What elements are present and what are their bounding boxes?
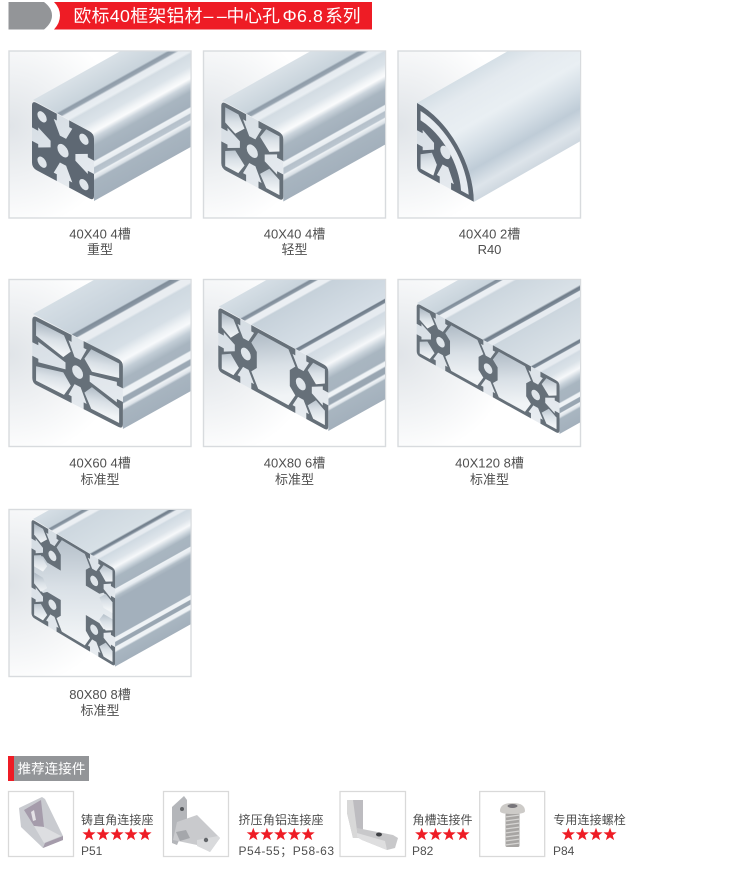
rating: 4 stars [562, 828, 617, 840]
extrusion body [34, 52, 190, 201]
connector 2: 挤压角铝连接座 [164, 792, 334, 858]
panel: 80X80 8槽 标准型 [8, 508, 192, 678]
header title: 系列 [325, 6, 361, 26]
caption: 40X60: 标准型 [80, 472, 120, 487]
extrusion body [418, 52, 580, 202]
panel: 40X40 2槽 R40 [397, 50, 582, 219]
panel: 40X120 8槽 标准型 [397, 278, 582, 448]
section tag: 推荐连接件 [8, 756, 89, 781]
extrusion body [34, 280, 190, 429]
caption: 40X80: 标准型 [275, 472, 314, 487]
caption: 40X40 重型: 重型 [87, 242, 113, 257]
header red bar [54, 2, 372, 30]
caption: 40X40 R40: R40 [478, 242, 501, 257]
header title: 6.8 [297, 6, 324, 26]
rating: 4 stars [415, 828, 470, 840]
header title: 中心孔 [226, 6, 280, 26]
cross-section face [218, 307, 328, 431]
cross-section face [221, 101, 283, 201]
caption: 80X80: 80X80 8槽 [69, 687, 131, 702]
thumbnail: cast corner bracket [8, 792, 74, 856]
connector 4: 专用连接螺栓 [480, 792, 626, 858]
cross-section face [32, 315, 123, 429]
caption: 40X40 R40: 40X40 2槽 [459, 226, 520, 242]
page ref: P84 [553, 844, 575, 858]
page ref: P51 [81, 844, 103, 858]
cross-section face [417, 103, 474, 202]
extrusion body [220, 280, 385, 431]
name: 专用连接螺栓 [553, 812, 626, 827]
cross-section face [417, 303, 560, 434]
panel: 40X80 6槽 标准型 [202, 278, 386, 448]
name: 挤压角铝连接座 [238, 812, 324, 827]
header title: 欧标40框架铝材 [74, 6, 203, 26]
section tag: 推荐连接件: 推荐连接件 [18, 760, 85, 776]
extrusion body [223, 52, 385, 202]
thumbnail: screw [480, 792, 545, 856]
thumbnail: extruded corner bracket [164, 792, 228, 856]
caption: 40X120: 标准型 [470, 472, 509, 487]
header title: –– [204, 6, 230, 26]
panel: 40X60 4槽 标准型 [8, 278, 192, 448]
caption: 40X40 轻型: 轻型 [281, 242, 308, 257]
extrusion body [418, 280, 580, 434]
caption: 40X40 重型: 40X40 4槽 [69, 226, 131, 242]
caption: 40X60: 40X60 4槽 [69, 456, 131, 470]
caption: 40X120: 40X120 8槽 [455, 456, 524, 470]
header grey tab [8, 2, 52, 30]
caption: 80X80: 标准型 [80, 703, 120, 718]
caption: 40X40 轻型: 40X40 4槽 [264, 226, 325, 242]
header title: Φ [282, 6, 297, 26]
connector 1: 铸直角连接座 [8, 792, 154, 858]
cross-section face [32, 100, 94, 201]
connector 3: 角槽连接件 [340, 792, 472, 858]
panel: 40X40 4槽 重型 [8, 50, 192, 219]
page ref: P82 [412, 844, 434, 858]
caption: 40X80: 40X80 6槽 [264, 456, 325, 470]
cross-section face [32, 519, 115, 667]
name: 角槽连接件 [412, 812, 472, 827]
page ref: P54-55；P58-63 [238, 844, 334, 858]
rating: 5 stars [247, 828, 315, 840]
rating: 5 stars [82, 828, 152, 840]
extrusion body [33, 510, 190, 666]
name: 铸直角连接座 [81, 812, 154, 827]
header banner [8, 2, 372, 30]
panel: 40X40 4槽 轻型 [202, 50, 386, 219]
thumbnail: corner slot connector [340, 792, 406, 856]
